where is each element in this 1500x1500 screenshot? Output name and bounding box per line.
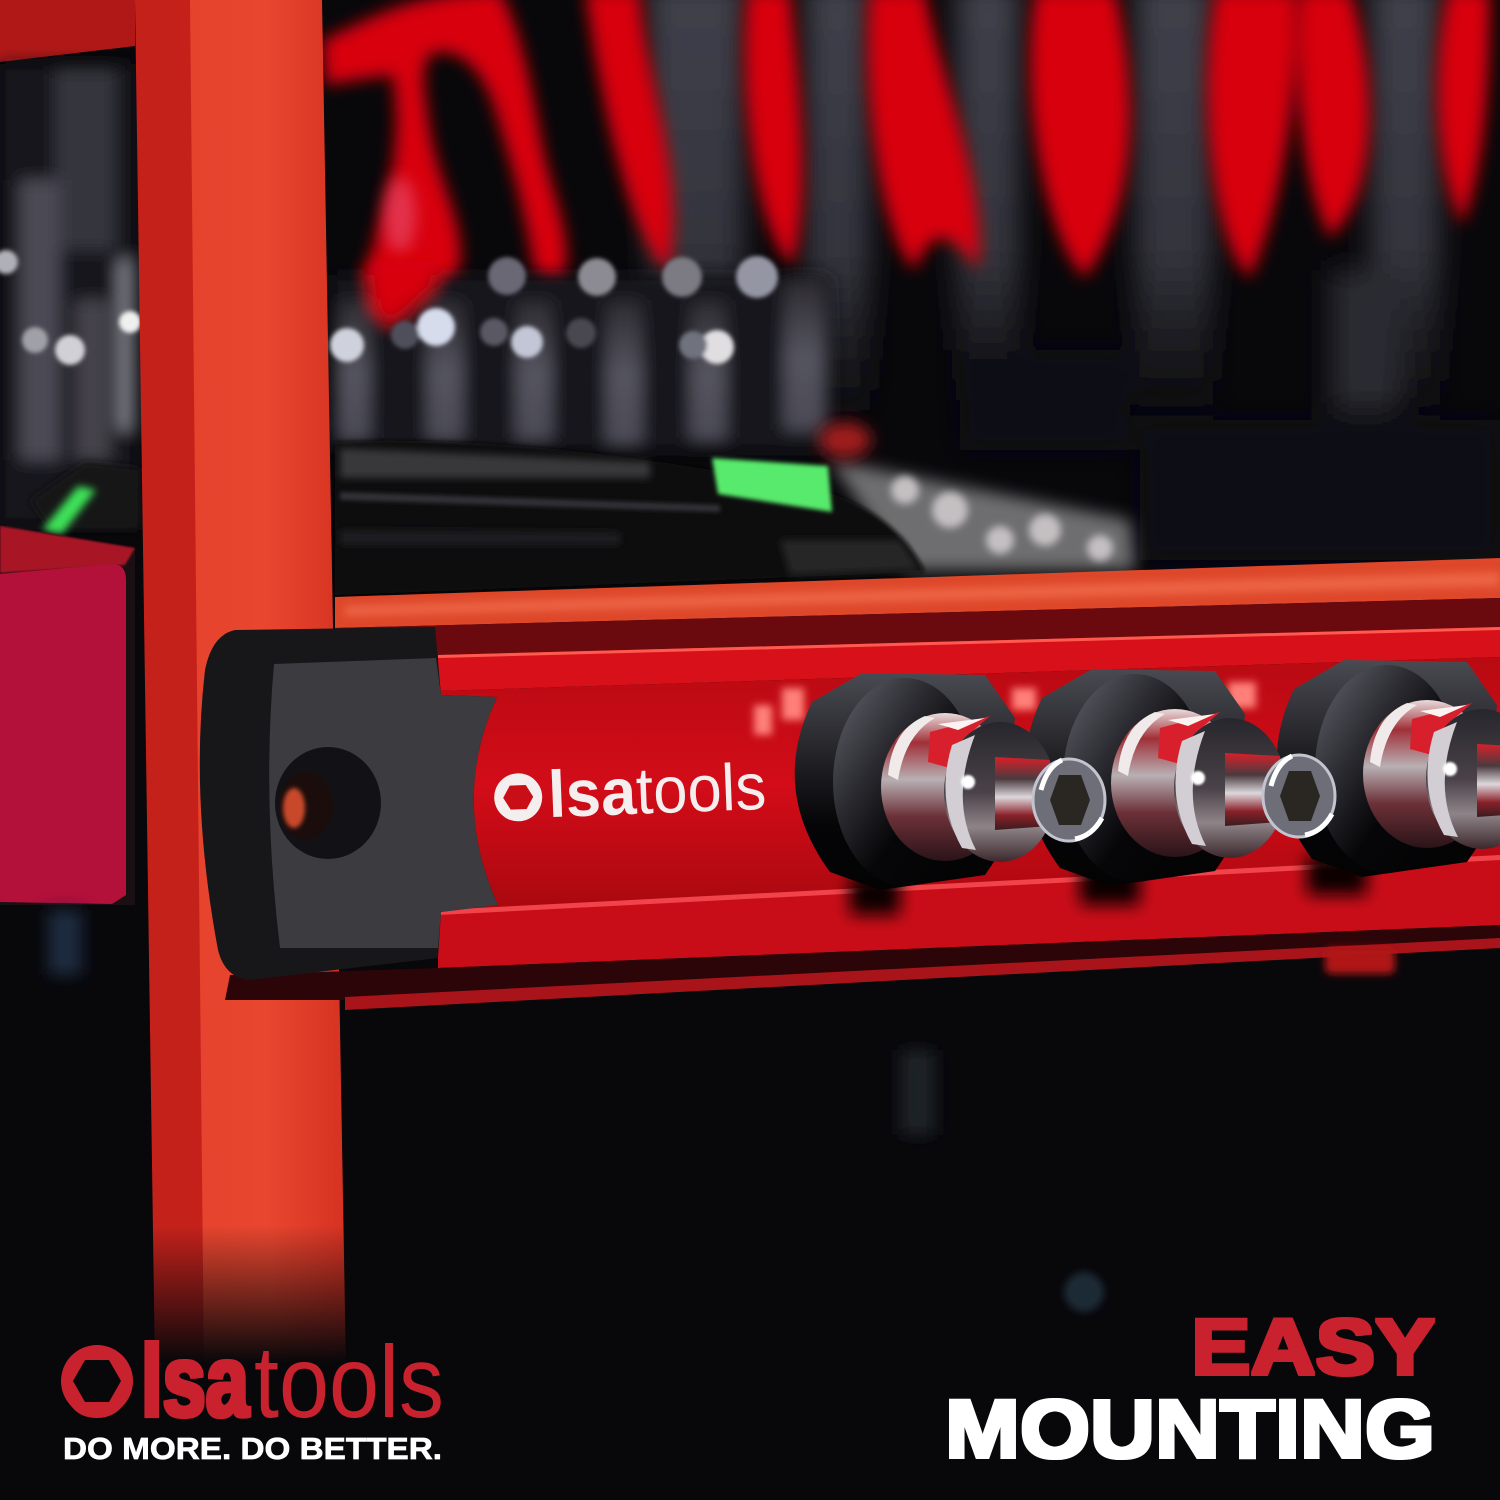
post fade	[130, 1225, 370, 1375]
headline line two: MOUNTING	[945, 1384, 1435, 1475]
floor reflections	[900, 1050, 1104, 1312]
lower thin lip	[345, 938, 1500, 1010]
rail logo: tools	[635, 749, 767, 828]
post side	[135, 0, 206, 1370]
wordmark: lsa	[141, 1324, 250, 1438]
window socket highlights	[0, 250, 141, 365]
top frame	[0, 0, 135, 62]
blurred socket row	[332, 262, 832, 450]
socket highlights	[330, 256, 778, 364]
rail logo	[493, 749, 767, 835]
magnetic end cap	[200, 627, 498, 980]
blurred metal bits	[819, 422, 1135, 570]
orange top lip	[335, 558, 1500, 628]
socket shadows	[850, 855, 1367, 915]
socket one	[795, 673, 1105, 890]
dark groove	[335, 598, 1500, 660]
cap face	[269, 658, 498, 948]
rail reflections	[754, 678, 1468, 735]
small red clip	[1325, 948, 1395, 974]
brand logo	[61, 1324, 444, 1466]
wordmark: tools	[254, 1325, 444, 1439]
blurred tools in background	[322, 0, 1500, 595]
under shadow	[225, 925, 1500, 1000]
left side window and shelf	[0, 0, 141, 975]
rail logo: lsa	[547, 754, 639, 831]
green tool accent	[30, 462, 140, 530]
wordmark	[61, 1324, 444, 1439]
post front	[190, 0, 346, 1370]
socket two	[1025, 669, 1335, 886]
upper bright strip	[438, 627, 1500, 691]
shelf rail	[225, 558, 1500, 1010]
lower bright strip	[438, 858, 1500, 968]
wordmark: O	[61, 1328, 133, 1438]
cap outer	[200, 627, 498, 980]
tagline: DO MORE. DO BETTER.	[63, 1431, 442, 1466]
power tool	[335, 441, 925, 595]
headline	[945, 1302, 1435, 1475]
red vertical post	[130, 0, 370, 1375]
pink highlight on grip	[384, 177, 416, 253]
rail logo: O	[493, 764, 543, 835]
window sockets	[0, 64, 135, 524]
main body	[438, 657, 1500, 915]
lower left glow	[48, 910, 82, 975]
socket three	[1277, 660, 1500, 877]
dark tool handles	[648, 0, 1500, 560]
headline line one: EASY	[1191, 1302, 1435, 1391]
red tool grips	[322, 0, 1490, 319]
crimson shelf end	[0, 525, 135, 905]
mounting hole	[275, 747, 381, 859]
